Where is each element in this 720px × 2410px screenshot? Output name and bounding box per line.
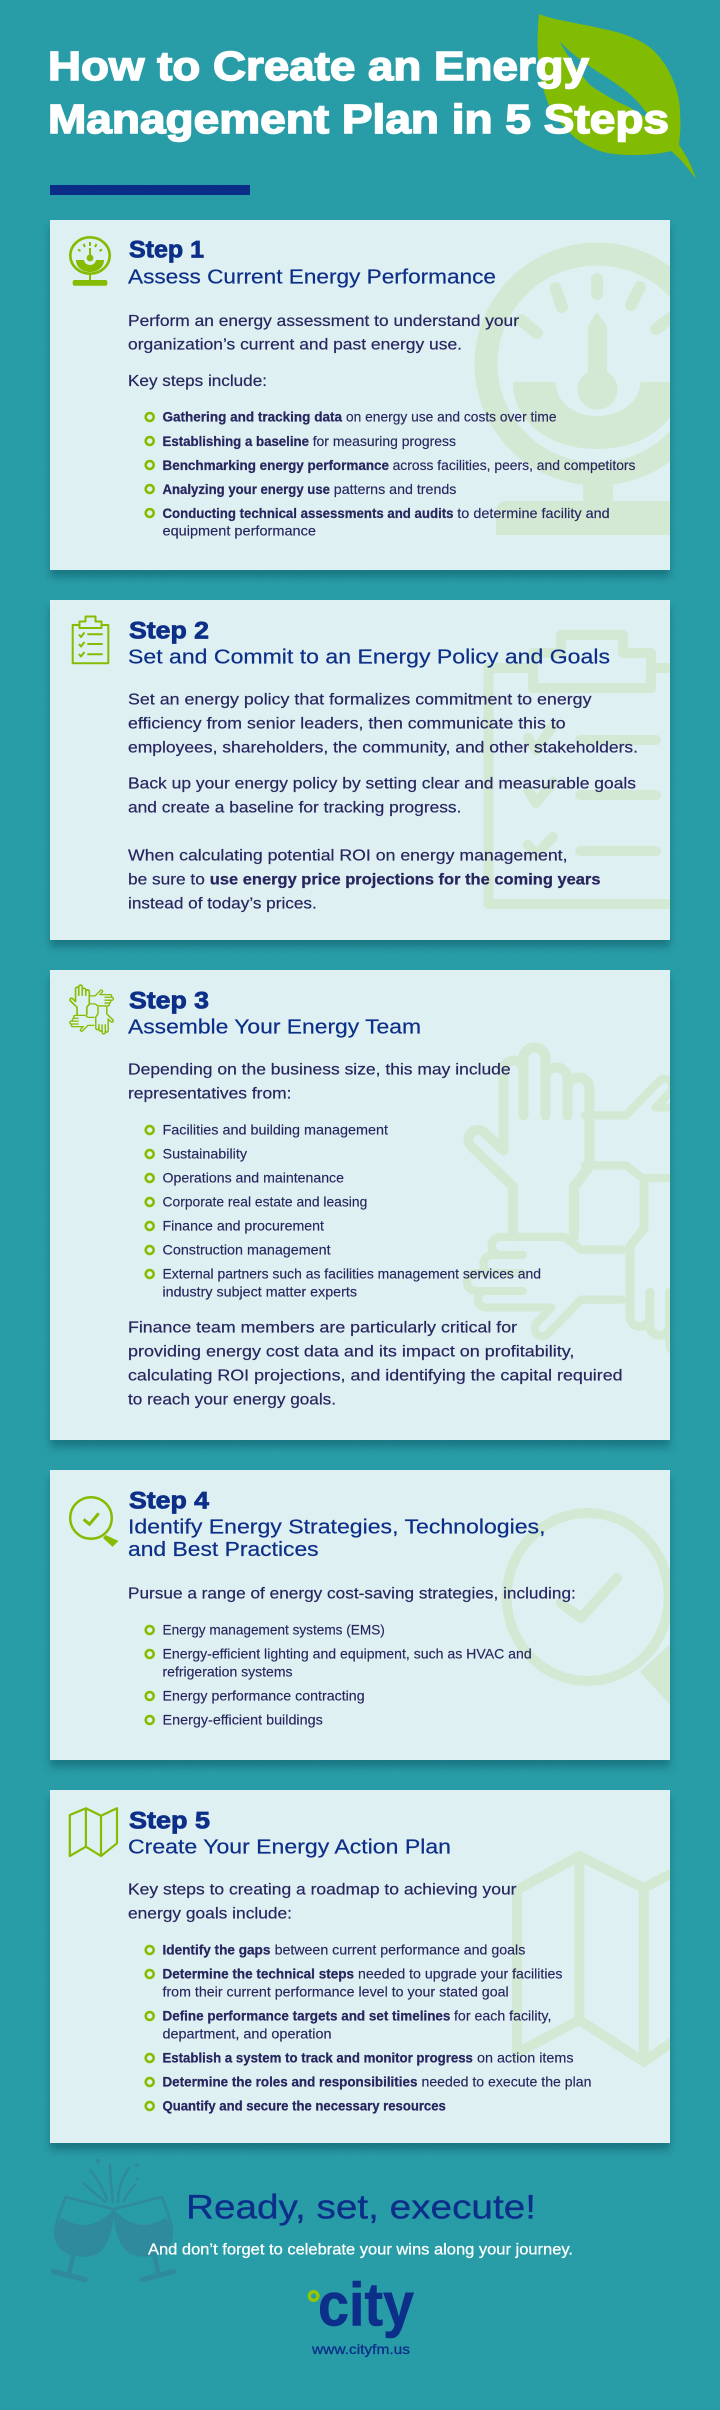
- bullet list: step 3: Facilities and building management: [162, 1122, 388, 1138]
- text block: roadmap intro: energy goals include:: [128, 1905, 292, 1922]
- bullet list: step 4: [146, 1622, 532, 1728]
- bullet list: step 1: for measuring progress: [313, 433, 456, 449]
- panel: step 2: [50, 600, 690, 940]
- bullet list: step 5: between current performance and goals: [275, 1942, 525, 1958]
- text block: finance team: Finance team members are particularly critical for: [128, 1319, 518, 1336]
- bullet list: step 1: equipment performance: [162, 523, 316, 539]
- watermark: map: [517, 1856, 690, 2062]
- subheading: step 4: Identify Energy Strategies, Technologies,: [128, 1515, 546, 1538]
- bullet list: step 3: Corporate real estate and leasing: [162, 1194, 367, 1210]
- panel: step 3: [50, 970, 720, 1440]
- bullet list: step 3: Operations and maintenance: [162, 1170, 344, 1186]
- closing heading: Ready, set, execute!: [186, 2189, 536, 2227]
- logo: city: city: [318, 2271, 414, 2339]
- bullet list: step 5: on action items: [477, 2050, 574, 2066]
- text block: finance team: [128, 1319, 623, 1408]
- icon: leaf: [538, 14, 696, 179]
- icon: toasting glasses: [54, 2158, 174, 2280]
- text block: finance team: to reach your energy goals.: [128, 1391, 336, 1408]
- subheading: step 3: Assemble Your Energy Team: [128, 1015, 421, 1038]
- bullet list: step 1: patterns and trends: [334, 481, 456, 497]
- text block: ROI note: [128, 847, 601, 912]
- bullet list: step 1: to determine facility and: [457, 505, 610, 521]
- bullet list: step 1: Conducting technical assessments and audits: [162, 505, 454, 521]
- text block: ROI note: be sure to: [128, 871, 205, 888]
- bullet list: step 5: for each facility,: [454, 2008, 551, 2024]
- bullet list: step 1: Establishing a baseline: [162, 433, 309, 449]
- panel: step 1: [50, 220, 708, 570]
- bullet list: step 4: Energy management systems (EMS): [162, 1622, 385, 1638]
- text block: intro: [128, 313, 520, 390]
- text block: ROI note: instead of today’s prices.: [128, 895, 317, 912]
- bullet list: step 5: Identify the gaps: [162, 1942, 271, 1958]
- text block: team intro: Depending on the business size, this may include: [128, 1061, 511, 1078]
- title: How to Create an Energy: [48, 43, 589, 89]
- bullet list: step 4: Energy-efficient buildings: [162, 1712, 323, 1728]
- title: Management Plan in 5 Steps: [48, 96, 669, 142]
- text block: energy policy: efficiency from senior leaders, then communicate this to: [128, 715, 566, 732]
- text block: energy policy: employees, shareholders, the community, and other stakeholders.: [128, 739, 638, 756]
- bullet list: step 5: Determine the roles and responsibilities: [162, 2074, 418, 2090]
- bullet list: step 5: Define performance targets and set timelines: [162, 2008, 451, 2024]
- heading: step 2: Step 2: [129, 617, 209, 644]
- title underline bar: [50, 185, 250, 195]
- subheading: step 5: Create Your Energy Action Plan: [128, 1835, 451, 1858]
- icon: hands: [70, 985, 113, 1034]
- watermark: clipboard: [488, 635, 690, 904]
- bullet list: step 5: Establish a system to track and monitor progress: [162, 2050, 473, 2066]
- text block: finance team: providing energy cost data and its impact on profitability,: [128, 1343, 574, 1360]
- bullet list: step 4: Energy-efficient lighting and equipment, such as HVAC and: [162, 1646, 532, 1662]
- watermark: gauge: [486, 254, 708, 535]
- bullet list: step 1: Analyzing your energy use: [162, 481, 330, 497]
- bullet list: step 3: Sustainability: [162, 1146, 247, 1162]
- bullet list: step 1: [146, 409, 635, 539]
- bullet list: step 5: needed to execute the plan: [422, 2074, 591, 2090]
- text block: strategies intro: Pursue a range of energy cost-saving strategies, including:: [128, 1585, 576, 1602]
- bullet list: step 4: Energy performance contracting: [162, 1688, 365, 1704]
- icon: clipboard: [73, 616, 108, 663]
- heading: step 1: Step 1: [129, 236, 204, 264]
- text block: energy policy: Set an energy policy that formalizes commitment to energy: [128, 691, 592, 708]
- bullet list: step 1: Benchmarking energy performance: [162, 457, 389, 473]
- closing tagline: And don’t forget to celebrate your wins along your journey.: [148, 2241, 573, 2258]
- text block: intro: Perform an energy assessment to understand your: [128, 313, 520, 330]
- bullet list: step 3: industry subject matter experts: [162, 1284, 357, 1300]
- bullet list: step 3: [146, 1122, 541, 1300]
- bullet list: step 3: Finance and procurement: [162, 1218, 324, 1234]
- watermark: magnifier: [507, 1513, 672, 1707]
- bullet list: step 1: Gathering and tracking data: [162, 409, 342, 425]
- text block: intro: Key steps include:: [128, 373, 267, 390]
- bullet list: step 5: from their current performance level to your stated goal: [162, 1984, 509, 2000]
- text block: ROI note: When calculating potential ROI on energy management,: [128, 847, 568, 864]
- text block: ROI note: use energy price projections for the coming years: [210, 871, 601, 888]
- subheading: step 4: [128, 1515, 546, 1561]
- watermark: hands: [463, 1042, 670, 1354]
- panel: step 5: [50, 1790, 690, 2143]
- subheading: step 4: and Best Practices: [128, 1538, 319, 1561]
- subheading: step 1: Assess Current Energy Performance: [128, 265, 496, 288]
- icon: gauge: [70, 237, 110, 286]
- text block: roadmap intro: [128, 1881, 517, 1922]
- panel: step 4: [50, 1470, 672, 1760]
- heading: step 3: Step 3: [129, 987, 209, 1014]
- bullet list: step 5: [146, 1942, 591, 2114]
- text block: energy policy: and create a baseline for tracking progress.: [128, 799, 461, 816]
- bullet list: step 5: department, and operation: [162, 2026, 332, 2042]
- bullet list: step 1: across facilities, peers, and competitors: [393, 457, 636, 473]
- bullet list: step 5: Quantify and secure the necessary resources: [162, 2098, 446, 2114]
- website url: www.cityfm.us: [311, 2341, 410, 2357]
- text block: intro: organization’s current and past energy use.: [128, 337, 462, 354]
- title: [48, 43, 669, 142]
- bullet list: step 4: refrigeration systems: [162, 1664, 292, 1680]
- icon: map: [70, 1808, 117, 1856]
- text block: team intro: representatives from:: [128, 1085, 292, 1102]
- heading: step 4: Step 4: [129, 1487, 210, 1514]
- text block: team intro: [128, 1061, 511, 1102]
- bullet list: step 3: Construction management: [162, 1242, 331, 1258]
- bullet list: step 1: on energy use and costs over time: [346, 409, 557, 425]
- text block: finance team: calculating ROI projections, and identifying the capital required: [128, 1367, 623, 1384]
- bullet list: step 3: External partners such as facilities management services and: [162, 1266, 541, 1282]
- icon: magnifier: [70, 1497, 118, 1547]
- text block: roadmap intro: Key steps to creating a roadmap to achieving your: [128, 1881, 517, 1898]
- bullet list: step 5: needed to upgrade your facilities: [358, 1966, 562, 1982]
- heading: step 5: Step 5: [129, 1807, 210, 1834]
- text block: energy policy: [128, 691, 638, 816]
- bullet list: step 5: Determine the technical steps: [162, 1966, 354, 1982]
- subheading: step 2: Set and Commit to an Energy Policy and Goals: [128, 645, 610, 668]
- text block: energy policy: Back up your energy policy by setting clear and measurable goals: [128, 775, 636, 792]
